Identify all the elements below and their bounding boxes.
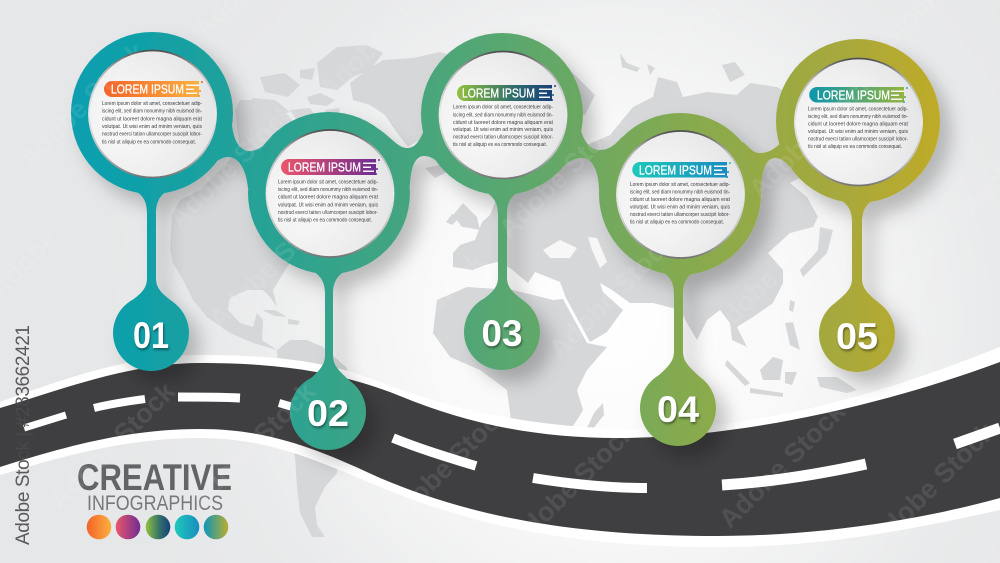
- stock watermark pattern: Adobe Stock: [493, 106, 632, 244]
- body text 2: Lorem ipsum dolor sit amet, consectetuer adip-: [278, 179, 378, 185]
- body text 3: volutpat. Ut wisi enim ad minim veniam, quis: [453, 127, 553, 133]
- road: white edge band: [0, 347, 1000, 547]
- stock watermark pattern: Adobe Stock: [743, 66, 882, 204]
- stock watermark pattern: Adobe Stock: [43, 376, 182, 514]
- road: centre dashes: [24, 397, 1000, 488]
- ring 2: [248, 112, 410, 274]
- body text 2: nostrud exerci tation ullamcorper suscipit lobor-: [278, 210, 378, 216]
- map: Madagascar: [586, 403, 604, 430]
- stock watermark pattern: Adobe Stock: [503, 416, 642, 554]
- stock watermark pattern: Adobe Stock: [378, 396, 517, 534]
- body text 5: volutpat. Ut wisi enim ad minim veniam, quis: [808, 129, 908, 135]
- heading pill 1: LOREM IPSUM: [111, 82, 184, 96]
- number 03: 03: [482, 313, 522, 354]
- panel disc 2: [266, 130, 394, 257]
- body text 4: Lorem ipsum dolor sit amet, consectetuer adip-: [630, 182, 730, 188]
- number 05: 05: [836, 316, 878, 357]
- map: Africa: [433, 287, 607, 430]
- body text 4: nostrud exerci tation ullamcorper suscipit lobor-: [630, 212, 730, 218]
- heading pill 2: LOREM IPSUM: [288, 160, 361, 174]
- road: [0, 347, 1000, 547]
- map: South America: [277, 340, 350, 537]
- logo title: CREATIVE: [77, 457, 232, 498]
- stock watermark pattern: Adobe Stock: [713, 396, 852, 534]
- body text 4: iscing elit, sed diam nonummy nibh euismod tin-: [630, 190, 730, 196]
- body text 1: cidunt ut laoreet dolore magna aliquam erat: [102, 116, 203, 122]
- map: Iceland: [425, 165, 447, 178]
- pin stem 3: [481, 190, 524, 301]
- panel disc 5: [795, 58, 922, 186]
- body text 4: volutpat. Ut wisi enim ad minim veniam, quis: [630, 204, 730, 210]
- body text 2: cidunt ut laoreet dolore magna aliquam erat: [278, 195, 379, 201]
- heading pill 4: LOREM IPSUM: [639, 164, 712, 178]
- timeline shape with rings, connectors and pins: [71, 32, 940, 450]
- pin circle 3: [464, 294, 540, 370]
- body text 1: Lorem ipsum dolor sit amet, consectetuer adip-: [102, 101, 202, 107]
- body text 5: iscing elit, sed diam nonummy nibh euismod tin-: [808, 114, 908, 120]
- number 01: 01: [133, 315, 169, 356]
- logo subtitle: INFOGRAPHICS: [87, 492, 223, 515]
- body text 1: volutpat. Ut wisi enim ad minim veniam, quis: [102, 124, 202, 130]
- pin stem 4: [657, 270, 700, 377]
- body text 3: cidunt ut laoreet dolore magna aliquam erat: [453, 120, 554, 126]
- stock watermark pattern: Adobe Stock: [703, 206, 842, 344]
- body text 1: iscing elit, sed diam nonummy nibh euismod tin-: [102, 109, 202, 115]
- colour swatches: [87, 515, 228, 539]
- body text 3: [453, 105, 554, 148]
- connector 3-4: [540, 130, 640, 190]
- heading pill 3: LOREM IPSUM: [462, 86, 535, 100]
- map: Black Sea and Caspian Sea: [543, 237, 607, 268]
- heading pill 5: LOREM IPSUM: [817, 88, 890, 102]
- body text 4: tis nisl ut aliquip ex ea commodo consequat.: [630, 220, 724, 226]
- panel: step 5: [795, 58, 922, 186]
- body text 5: Lorem ipsum dolor sit amet, consectetuer adip-: [808, 106, 908, 112]
- body text 3: iscing elit, sed diam nonummy nibh euismod tin-: [453, 112, 553, 118]
- body text 4: [630, 182, 731, 226]
- body text 3: tis nisl ut aliquip ex ea commodo consequat.: [453, 142, 547, 148]
- stock watermark pattern: Adobe Stock: [13, 36, 152, 174]
- panel disc 4: [617, 131, 744, 258]
- body text 5: [808, 106, 909, 150]
- ring 5: [776, 39, 940, 203]
- panel: step 4: [617, 131, 744, 258]
- body text 1: [102, 101, 203, 145]
- world map: [170, 45, 857, 537]
- logo: Creative Infographics: [77, 457, 232, 539]
- body text 2: volutpat. Ut wisi enim ad minim veniam, quis: [278, 202, 378, 208]
- connector 2-3: [380, 130, 450, 185]
- pin circle 1: [113, 295, 189, 371]
- map: Scandinavia and Novaya Zemlya: [570, 53, 745, 115]
- panel: step 2: [266, 130, 394, 257]
- stock watermark pattern: Adobe Stock: [353, 246, 492, 384]
- ring 3: [421, 33, 583, 195]
- pin stem 1: [130, 189, 173, 302]
- map: Canadian arctic islands: [250, 45, 383, 126]
- number 02: 02: [307, 393, 349, 434]
- body text 5: tis nisl ut aliquip ex ea commodo consequat.: [808, 144, 902, 150]
- stock watermark pattern: Adobe Stock: [863, 416, 1000, 554]
- map: Greenland: [350, 52, 470, 147]
- map: Caribbean islands: [262, 310, 300, 325]
- connector 1-2: [170, 100, 300, 188]
- pin stem 2: [308, 269, 350, 381]
- stock watermark pattern: Adobe Stock: [543, 226, 682, 364]
- panel: step 1: [89, 50, 216, 178]
- panel disc 3: [440, 52, 566, 178]
- stock watermark pattern: Adobe Stock: [163, 96, 302, 234]
- panel disc 1: [89, 50, 216, 178]
- map: Japan and east Asian islands: [785, 227, 833, 350]
- body text 2: [278, 179, 379, 224]
- body text 4: cidunt ut laoreet dolore magna aliquam erat: [630, 197, 731, 203]
- map: Indonesia and New Guinea: [725, 357, 857, 397]
- road: asphalt: [0, 362, 1000, 536]
- pin circle 5: [819, 296, 895, 372]
- connector 4-5: [720, 142, 810, 185]
- body text 2: iscing elit, sed diam nonummy nibh euismod tin-: [278, 187, 378, 193]
- body text 1: nostrud exerci tation ullamcorper suscipit lobor-: [102, 132, 202, 138]
- map: British Isles: [446, 203, 480, 230]
- body text 5: nostrud exerci tation ullamcorper suscipit lobor-: [808, 136, 908, 142]
- body text 5: cidunt ut laoreet dolore magna aliquam erat: [808, 122, 909, 128]
- body text 3: nostrud exerci tation ullamcorper suscipit lobor-: [453, 135, 553, 141]
- panel: step 3: [440, 52, 566, 178]
- stock watermark pattern: Adobe Stock: [183, 376, 322, 514]
- ring 4: [599, 113, 761, 275]
- pin circle 2: [290, 374, 366, 450]
- stock watermark pattern: Adobe Stock: [203, 196, 342, 334]
- body text 1: tis nisl ut aliquip ex ea commodo consequat.: [102, 139, 196, 145]
- number 04: 04: [657, 389, 699, 430]
- stock id caption: Adobe Stock | #283662421: [13, 325, 34, 545]
- ring 1: [71, 32, 233, 194]
- body text 2: tis nisl ut aliquip ex ea commodo consequat.: [278, 218, 372, 224]
- pin stem 5: [835, 198, 879, 303]
- pin circle 4: [640, 370, 716, 446]
- body text 3: Lorem ipsum dolor sit amet, consectetuer adip-: [453, 105, 553, 111]
- map: Eurasia: [453, 77, 850, 347]
- map: North America: [170, 100, 360, 350]
